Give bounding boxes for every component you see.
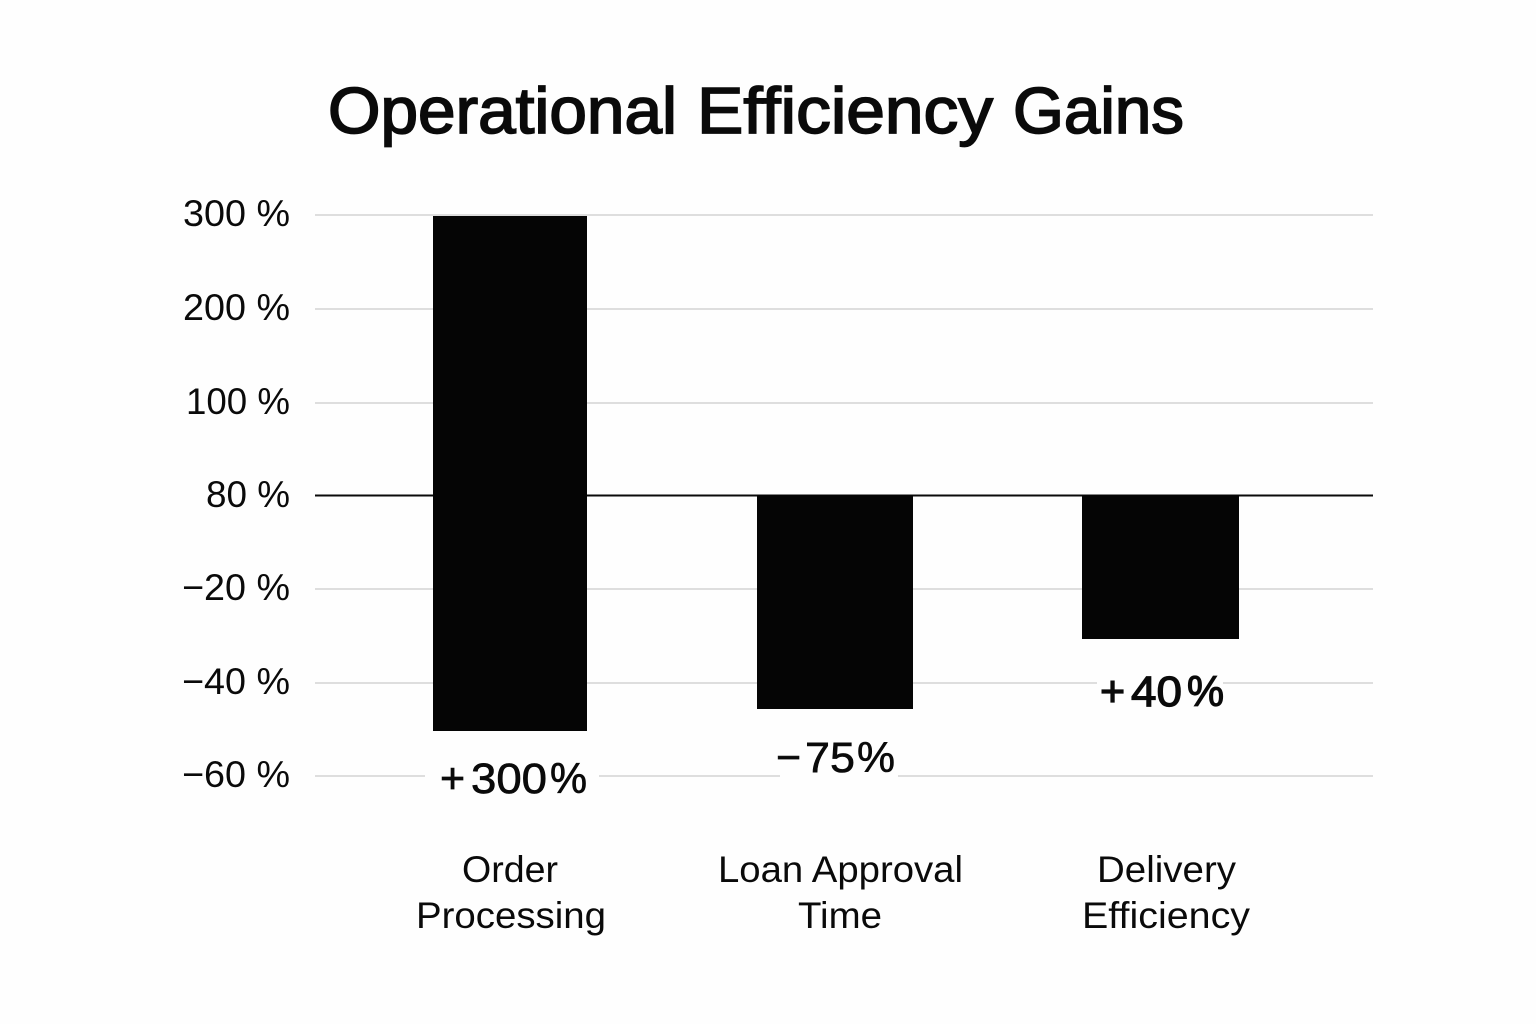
value label: +40%: 40 xyxy=(1131,668,1182,716)
title: Operational xyxy=(328,74,677,147)
category label: Delivery Efficiency: Delivery xyxy=(1097,849,1237,890)
value label: −75% xyxy=(776,734,898,785)
category label: Delivery Efficiency xyxy=(1082,849,1251,936)
bar: Order Processing xyxy=(433,216,587,731)
y-axis labels: 300 % xyxy=(183,193,290,234)
y-axis labels: 80 % xyxy=(206,474,290,515)
value label: +40%: % xyxy=(1187,668,1224,716)
y-axis labels: 200 % xyxy=(183,287,290,328)
bar: Delivery Efficiency xyxy=(1082,495,1239,639)
value label: +40%: + xyxy=(1100,668,1125,716)
bar: Loan Approval Time xyxy=(757,495,913,709)
y-axis labels: 100 % xyxy=(186,381,290,422)
value label: +300% xyxy=(425,755,599,803)
y-axis labels: −20 % xyxy=(182,567,290,608)
category label: Order Processing: Processing xyxy=(416,895,606,936)
category label: Loan Approval Time: Time xyxy=(798,895,882,936)
title: Efficiency xyxy=(697,74,994,147)
value label: +300%: 300 xyxy=(471,755,547,803)
value label: −75%: % xyxy=(857,734,895,782)
value label: −75%: − xyxy=(776,734,801,782)
category label: Loan Approval Time: Loan Approval xyxy=(718,849,963,890)
category label: Order Processing: Order xyxy=(462,849,558,890)
category label: Delivery Efficiency: Efficiency xyxy=(1082,895,1251,936)
category label: Loan Approval Time xyxy=(718,849,963,936)
title: Gains xyxy=(1013,74,1184,147)
category label: Order Processing xyxy=(416,849,606,936)
value label: +300%: + xyxy=(440,755,465,803)
y-axis labels: −40 % xyxy=(182,661,290,702)
bar chart xyxy=(182,193,1373,936)
y-axis labels xyxy=(182,193,290,795)
value label: −75%: 75 xyxy=(805,734,855,782)
value label: +40% xyxy=(1097,668,1224,716)
y-axis labels: −60 % xyxy=(182,754,290,795)
value label: +300%: % xyxy=(550,755,587,803)
